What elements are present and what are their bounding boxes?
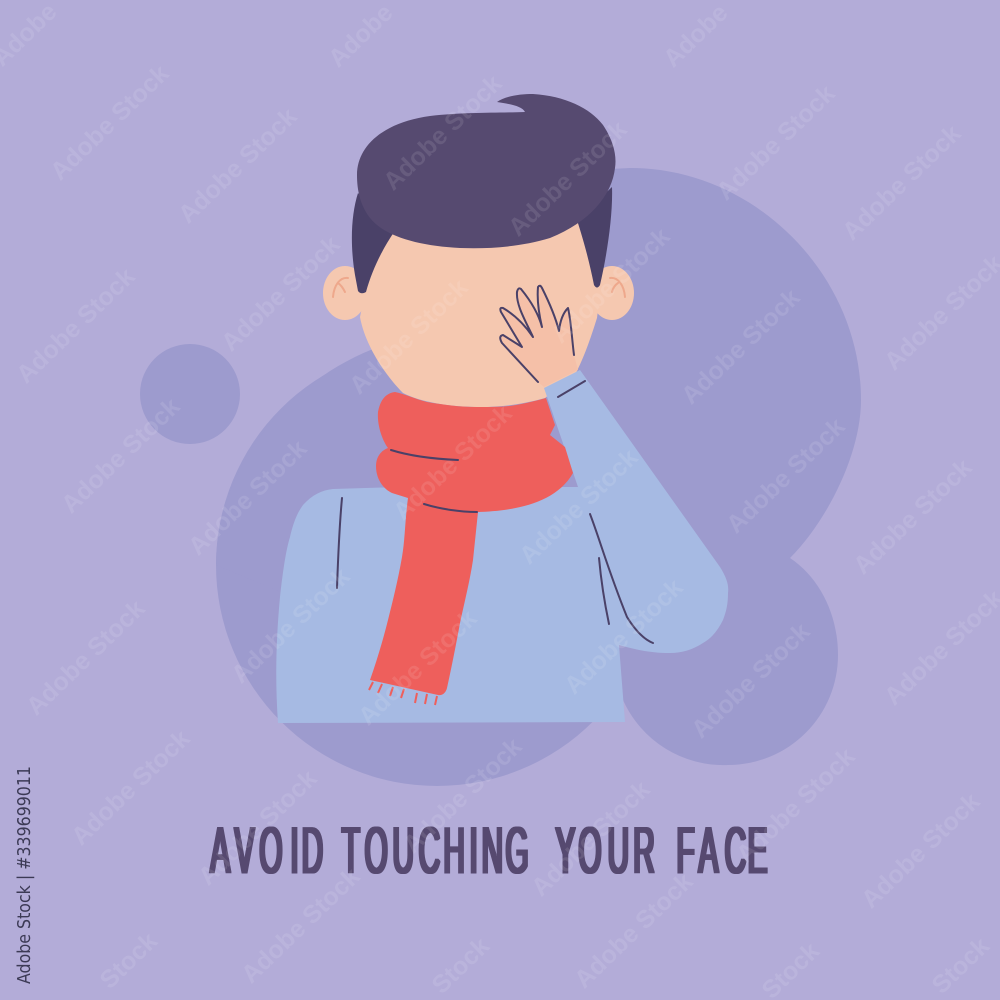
watermark: Adobe Stock: [226, 563, 355, 689]
watermark: Adobe: [323, 0, 398, 73]
watermark: Adobe Stock: [193, 765, 322, 891]
watermark: Adobe Stock: [546, 223, 675, 349]
watermark: Adobe: [658, 0, 733, 73]
hair: [357, 94, 616, 248]
face: [360, 222, 600, 407]
watermark: Adobe Stock: [66, 725, 195, 851]
watermark: Adobe Stock: [173, 103, 302, 229]
watermark: Adobe Stock: [21, 595, 150, 721]
scarf: [370, 392, 573, 695]
left ear: [323, 266, 367, 320]
watermark: Adobe Stock: [236, 863, 365, 989]
watermark: Adobe Stock: [731, 743, 860, 869]
watermark: Adobe Stock: [848, 454, 977, 580]
watermark: Adobe Stock: [183, 435, 312, 561]
sweater fold lines: [337, 381, 653, 643]
watermark: Stock: [94, 927, 163, 994]
right ear: [590, 266, 634, 320]
sweater with raised arm: [276, 370, 728, 723]
watermark: Adobe Stock: [686, 618, 815, 744]
title: AVOID TOUCHING YOUR FACE: [210, 814, 767, 887]
right side hair: [577, 187, 612, 288]
watermark: Adobe Stock: [559, 574, 688, 700]
watermark: Adobe Stock: [856, 788, 985, 914]
watermark: Adobe Stock: [45, 60, 174, 186]
watermark: Adobe Stock: [526, 776, 655, 902]
left side hair: [352, 193, 394, 293]
scarf lines: [391, 450, 477, 512]
watermark: Adobe Stock: [569, 868, 698, 994]
watermark: Adobe Stock: [11, 263, 140, 389]
background blob circles: [140, 168, 861, 786]
watermark: Adobe Stock: [344, 274, 473, 400]
watermark: Adobe Stock: [398, 733, 527, 859]
watermark: Adobe Stock: [711, 80, 840, 206]
watermark: Stock: [926, 932, 995, 999]
watermark: Adobe Stock: [837, 120, 966, 246]
watermark: Stock: [426, 932, 495, 999]
hand: [500, 286, 578, 387]
person: [276, 94, 728, 723]
watermark: Adobe Stock: [388, 400, 517, 526]
watermark: Adobe Stock: [676, 284, 805, 410]
watermark: Adobe Stock: [721, 413, 850, 539]
stock id: Adobe Stock | #339699011: [14, 766, 35, 984]
watermark: Adobe Stock: [514, 444, 643, 570]
watermark: Adobe Stock: [216, 231, 345, 357]
watermark: Adobe Stock: [378, 70, 507, 196]
watermark: Adobe Stock: [56, 393, 185, 519]
watermark: Adobe Stock: [503, 116, 632, 242]
watermark: Adobe Stock: [353, 605, 482, 731]
scarf fringe: [369, 682, 437, 705]
